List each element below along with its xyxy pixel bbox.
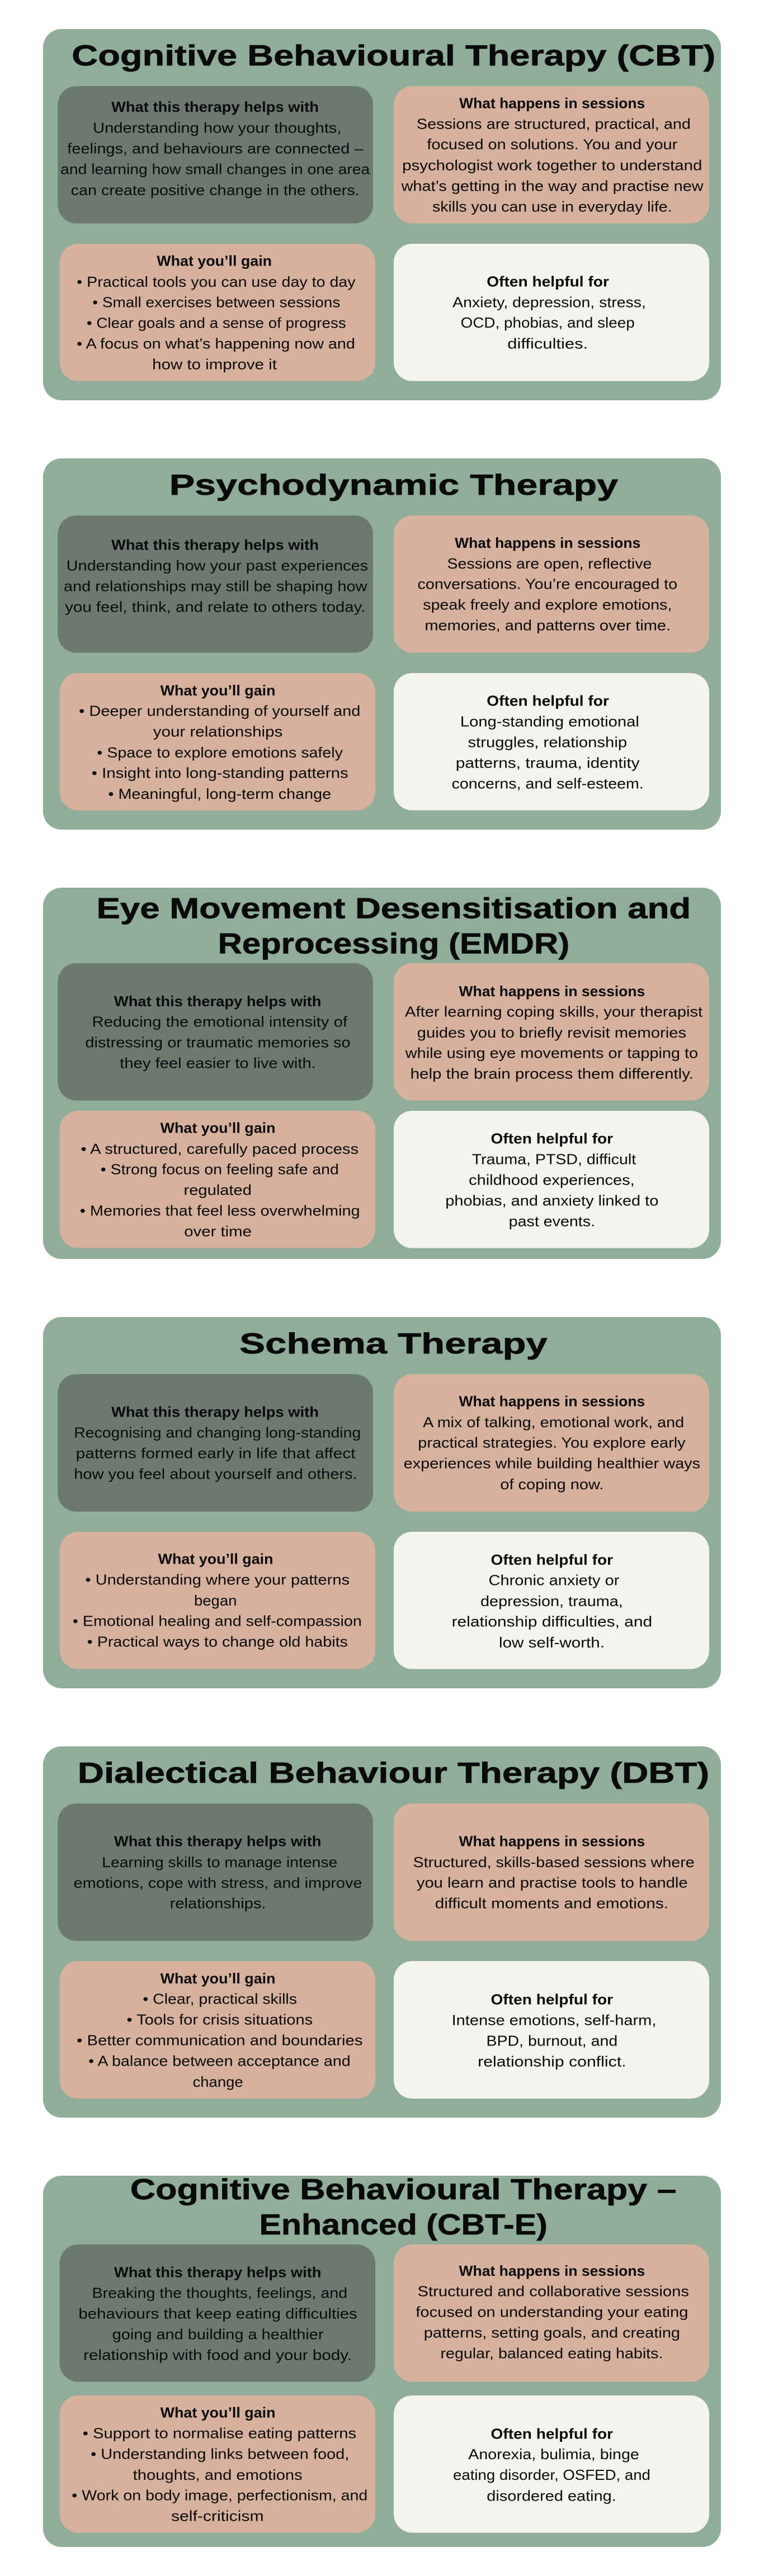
card: often helpful for: OCD, phobias, and sleep <box>461 314 635 331</box>
card: what this therapy helps with: and learning how small changes in one area <box>60 161 370 178</box>
card: what you'll gain: • Insight into long-standing patterns <box>92 765 348 782</box>
card: often helpful for: disordered eating. <box>487 2487 616 2504</box>
card: often helpful for: Anxiety, depression, stress, <box>452 294 646 311</box>
card: often helpful for: Intense emotions, self-harm, <box>452 2012 656 2029</box>
title: EMDR: Eye Movement Desensitisation and <box>96 892 691 925</box>
card: often helpful for: Often helpful for <box>491 1130 613 1147</box>
card: often helpful for: struggles, relationship <box>468 733 627 750</box>
card: often helpful for <box>394 2395 709 2533</box>
card: often helpful for <box>394 1961 709 2099</box>
card: what happens in sessions: what’s getting in the way and practise new <box>400 178 704 195</box>
card: what this therapy helps with: behaviours that keep eating difficulties <box>78 2305 357 2322</box>
title: EMDR: Reprocessing (EMDR) <box>218 927 569 960</box>
card: what you'll gain <box>60 1961 375 2099</box>
panel: Schema Therapy <box>43 1317 721 1688</box>
card: what this therapy helps with: Breaking the thoughts, feelings, and <box>92 2285 347 2302</box>
card: what this therapy helps with: patterns formed early in life that affect <box>76 1445 356 1461</box>
card: what this therapy helps with <box>58 1374 373 1512</box>
card: what you'll gain: • Space to explore emotions safely <box>97 744 343 761</box>
card: what you'll gain: self-criticism <box>171 2508 264 2525</box>
card: often helpful for: Long-standing emotional <box>460 713 639 730</box>
title: EMDR <box>96 892 691 960</box>
card: often helpful for: relationship conflict. <box>478 2053 626 2070</box>
card: often helpful for: depression, trauma, <box>480 1593 623 1609</box>
card: often helpful for: Often helpful for <box>491 1991 613 2008</box>
card: what you'll gain: What you’ll gain <box>157 253 272 269</box>
card: what you'll gain: What you’ll gain <box>158 1551 273 1568</box>
card: often helpful for: relationship difficulties, and <box>452 1613 652 1630</box>
card: what you'll gain: change <box>193 2073 243 2090</box>
card: what this therapy helps with: Recognising and changing long-standing <box>74 1424 361 1441</box>
card: what this therapy helps with <box>58 515 373 653</box>
card: what you'll gain: • A structured, carefully paced process <box>81 1140 359 1157</box>
card: what this therapy helps with: What this therapy helps with <box>111 536 319 553</box>
card: what you'll gain: how to improve it <box>152 356 277 373</box>
title: CBT-E <box>130 2174 677 2241</box>
card: what you'll gain: • Tools for crisis situations <box>126 2011 313 2028</box>
card: what happens in sessions <box>394 86 709 224</box>
card: what happens in sessions: A mix of talking, emotional work, and <box>423 1414 684 1431</box>
card: what you'll gain: • A balance between acceptance and <box>88 2053 351 2070</box>
card: what this therapy helps with: feelings, and behaviours are connected – <box>67 140 364 157</box>
card: what happens in sessions: patterns, setting goals, and creating <box>424 2324 680 2341</box>
card: often helpful for: eating disorder, OSFED, and <box>453 2466 650 2483</box>
card: what you'll gain <box>60 1111 375 1248</box>
card: what happens in sessions: help the brain process them differently. <box>411 1066 694 1082</box>
title: Schema: Schema Therapy <box>239 1328 548 1360</box>
card: what happens in sessions <box>394 515 709 653</box>
title: DBT: Dialectical Behaviour Therapy (DBT) <box>78 1757 709 1789</box>
card: often helpful for: patterns, trauma, identity <box>456 755 640 771</box>
card: what happens in sessions: while using eye movements or tapping to <box>405 1044 698 1061</box>
card: what this therapy helps with <box>60 2244 375 2382</box>
card: what you'll gain: • Work on body image, perfectionism, and <box>72 2487 367 2503</box>
card: what you'll gain: What you’ll gain <box>161 1120 275 1137</box>
card: what happens in sessions: skills you can use in everyday life. <box>432 198 672 215</box>
card: what happens in sessions: you learn and practise tools to handle <box>417 1874 688 1891</box>
card: what happens in sessions: focused on solutions. You and your <box>427 136 678 153</box>
card: what happens in sessions: After learning coping skills, your therapist <box>405 1003 703 1020</box>
card: what you'll gain: What you’ll gain <box>161 1970 275 1987</box>
card: what you'll gain: • Deeper understanding of yourself and <box>79 702 360 719</box>
title: CBT: Cognitive Behavioural Therapy (CBT) <box>72 40 715 72</box>
card: what this therapy helps with: relationship with food and your body. <box>83 2346 352 2363</box>
card: what happens in sessions <box>394 1374 709 1512</box>
card: what happens in sessions: speak freely and explore emotions, <box>423 596 672 613</box>
card: often helpful for: past events. <box>509 1213 595 1230</box>
card: what happens in sessions: focused on understanding your eating <box>416 2304 688 2321</box>
panel: Dialectical Behaviour Therapy <box>43 1746 721 2118</box>
card: what happens in sessions: Sessions are open, reflective <box>447 555 652 572</box>
card: what this therapy helps with: Learning skills to manage intense <box>102 1854 337 1871</box>
card: often helpful for <box>394 673 709 811</box>
card: what this therapy helps with: What this therapy helps with <box>111 1403 319 1420</box>
card: what you'll gain: • A focus on what’s happening now and <box>77 335 355 352</box>
card: what happens in sessions: memories, and patterns over time. <box>425 617 671 634</box>
card: what this therapy helps with: What this therapy helps with <box>114 2264 321 2281</box>
card: what happens in sessions: of coping now. <box>500 1476 603 1493</box>
card: what happens in sessions: What happens in sessions <box>455 534 640 551</box>
card: what you'll gain: • Better communication and boundaries <box>77 2032 362 2048</box>
card: what this therapy helps with <box>58 86 373 224</box>
card: what this therapy helps with: What this therapy helps with <box>111 98 319 115</box>
card: what you'll gain: • Understanding links between food, <box>91 2446 349 2463</box>
card: what this therapy helps with: Reducing the emotional intensity of <box>92 1013 348 1030</box>
card: what happens in sessions <box>394 1803 709 1941</box>
card: often helpful for: Often helpful for <box>487 693 609 709</box>
card: what this therapy helps with: how you feel about yourself and others. <box>74 1466 357 1483</box>
card: what happens in sessions <box>394 2244 709 2382</box>
title: CBT-E: Cognitive Behavioural Therapy – <box>130 2174 677 2206</box>
card: what happens in sessions: What happens in sessions <box>459 1393 645 1410</box>
card: often helpful for: Often helpful for <box>491 1551 613 1568</box>
card: what you'll gain: • Support to normalise eating patterns <box>83 2425 356 2441</box>
card: what you'll gain <box>60 244 375 381</box>
card: what happens in sessions: What happens in sessions <box>459 95 645 112</box>
card: what this therapy helps with <box>58 963 373 1101</box>
card: what this therapy helps with: Understanding how your thoughts, <box>93 119 341 136</box>
card: what this therapy helps with <box>58 1803 373 1941</box>
card: often helpful for: phobias, and anxiety linked to <box>445 1192 658 1209</box>
card: what you'll gain: What you’ll gain <box>161 682 275 699</box>
card: what you'll gain: • Emotional healing and self-compassion <box>73 1613 362 1630</box>
card: what happens in sessions: Sessions are structured, practical, and <box>417 115 691 132</box>
card: what this therapy helps with: distressing or traumatic memories so <box>85 1034 351 1051</box>
card: what you'll gain: • Clear, practical skills <box>143 1990 297 2007</box>
card: what this therapy helps with: Understanding how your past experiences <box>67 557 368 574</box>
card: often helpful for: difficulties. <box>507 335 588 352</box>
panel: EMDR <box>43 888 721 1259</box>
card: what this therapy helps with: relationships. <box>170 1895 266 1912</box>
card: what happens in sessions: regular, balanced eating habits. <box>441 2345 663 2362</box>
card: what happens in sessions: Structured, skills-based sessions where <box>413 1854 695 1871</box>
card: what you'll gain <box>60 2395 375 2533</box>
card: what happens in sessions: What happens in sessions <box>459 2262 645 2279</box>
card: often helpful for: low self-worth. <box>499 1634 605 1651</box>
card: what you'll gain: thoughts, and emotions <box>133 2466 303 2483</box>
card: what you'll gain: • Practical tools you can use day to day <box>77 273 356 290</box>
card: what this therapy helps with: and relationships may still be shaping how <box>64 577 367 594</box>
card: what happens in sessions <box>394 963 709 1101</box>
card: often helpful for: BPD, burnout, and <box>487 2032 617 2049</box>
card: often helpful for: childhood experiences, <box>469 1171 635 1188</box>
card: what happens in sessions: conversations. You’re encouraged to <box>417 576 677 593</box>
title: Psychodynamic: Psychodynamic Therapy <box>169 469 618 501</box>
card: what happens in sessions: difficult moments and emotions. <box>435 1895 668 1912</box>
card: what you'll gain: • Meaningful, long-term change <box>108 785 331 802</box>
card: what this therapy helps with: can create positive change in the others. <box>71 182 360 198</box>
card: often helpful for: concerns, and self-esteem. <box>452 775 644 792</box>
card: what you'll gain: • Clear goals and a sense of progress <box>87 315 346 332</box>
card: often helpful for <box>394 244 709 381</box>
card: what you'll gain: • Memories that feel less overwhelming <box>80 1202 360 1219</box>
card: what you'll gain: your relationships <box>153 723 282 740</box>
card: what you'll gain: regulated <box>183 1182 252 1199</box>
card: what you'll gain: • Strong focus on feeling safe and <box>101 1161 339 1177</box>
card: what you'll gain: • Small exercises between sessions <box>92 294 340 311</box>
card: what you'll gain: began <box>194 1592 237 1609</box>
card: what happens in sessions: What happens in sessions <box>459 1833 645 1850</box>
card: what you'll gain <box>60 1532 375 1669</box>
card: what this therapy helps with: What this therapy helps with <box>114 1833 321 1850</box>
card: what you'll gain: over time <box>184 1223 252 1240</box>
card: what happens in sessions: Structured and collaborative sessions <box>417 2283 689 2300</box>
card: what this therapy helps with: they feel easier to live with. <box>120 1054 316 1071</box>
card: what you'll gain: • Understanding where your patterns <box>85 1571 350 1588</box>
card: what this therapy helps with: What this therapy helps with <box>114 993 321 1010</box>
title: CBT-E: Enhanced (CBT-E) <box>260 2209 548 2241</box>
card: often helpful for: Often helpful for <box>487 273 609 290</box>
card: what this therapy helps with: you feel, think, and relate to others today. <box>65 598 365 615</box>
card: often helpful for: Often helpful for <box>491 2425 613 2442</box>
card: often helpful for <box>394 1532 709 1669</box>
card: what happens in sessions: experiences while building healthier ways <box>404 1455 700 1472</box>
card: what this therapy helps with: emotions, cope with stress, and improve <box>74 1874 362 1891</box>
card: what you'll gain <box>60 673 375 811</box>
card: what this therapy helps with: going and building a healthier <box>112 2326 324 2343</box>
card: what you'll gain: • Practical ways to change old habits <box>87 1633 348 1650</box>
card: what happens in sessions: practical strategies. You explore early <box>418 1434 686 1451</box>
card: what happens in sessions: What happens in sessions <box>459 983 645 1000</box>
card: what happens in sessions: psychologist work together to understand <box>402 157 702 173</box>
panel: Cognitive Behavioural Therapy <box>43 29 721 400</box>
card: often helpful for: Anorexia, bulimia, binge <box>468 2446 639 2463</box>
card: often helpful for <box>394 1111 709 1248</box>
card: what happens in sessions: guides you to briefly revisit memories <box>417 1024 686 1041</box>
panel: CBT-E <box>43 2174 721 2547</box>
card: often helpful for: Trauma, PTSD, difficult <box>472 1151 636 1168</box>
card: what you'll gain: What you’ll gain <box>161 2404 275 2421</box>
panel: Psychodynamic Therapy <box>43 458 721 830</box>
card: often helpful for: Chronic anxiety or <box>489 1572 620 1589</box>
